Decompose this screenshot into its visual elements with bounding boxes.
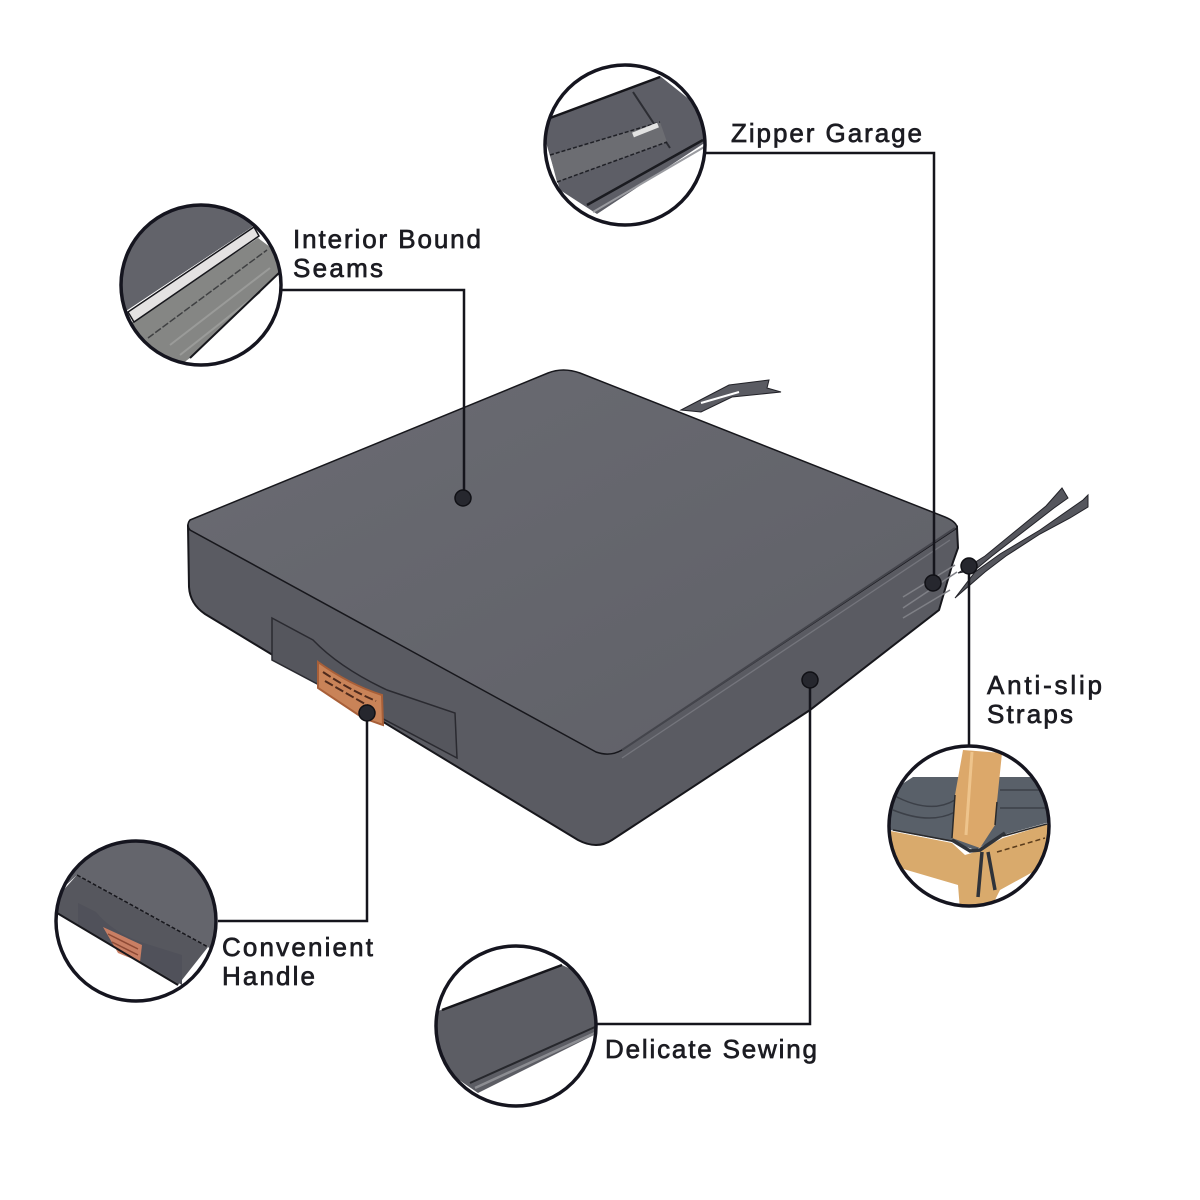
- strap: top: [681, 380, 781, 412]
- label: delicate sewing: Delicate Sewing: [605, 1034, 817, 1064]
- zipper lines: [903, 565, 957, 618]
- label: convenient handle: Handle: [222, 961, 315, 991]
- label: interior bound seams: Seams: [293, 253, 383, 283]
- callout line: anti-slip straps: [961, 558, 977, 748]
- detail circle: sewing: [430, 945, 605, 1107]
- label: interior bound seams: [293, 224, 481, 283]
- label: zipper garage: Zipper Garage: [731, 118, 922, 148]
- label: anti-slip straps: Anti-slip: [987, 670, 1102, 700]
- strap: right: [955, 488, 1088, 598]
- detail circle: handle: [50, 840, 225, 1002]
- handle patch: [272, 618, 457, 758]
- callout line: handle: [218, 705, 375, 921]
- label: interior bound seams: Interior Bound: [293, 224, 481, 254]
- cushion body side: [188, 526, 958, 845]
- callout line: interior bound seams: [281, 290, 471, 506]
- cushion top: [188, 370, 957, 754]
- label: convenient handle: Convenient: [222, 932, 374, 962]
- piping edge: [622, 528, 955, 758]
- detail circle: interior seams: [119, 203, 283, 367]
- callout line: zipper garage: [705, 153, 941, 591]
- detail circle: straps: [885, 745, 1052, 910]
- detail circle: zipper: [540, 64, 715, 226]
- label: anti-slip straps: Straps: [987, 699, 1073, 729]
- leather handle tag: [318, 662, 383, 725]
- label: convenient handle: [222, 932, 374, 991]
- callout line: delicate sewing: [597, 672, 818, 1024]
- label: anti-slip straps: [987, 670, 1102, 729]
- cushion: [188, 370, 1088, 845]
